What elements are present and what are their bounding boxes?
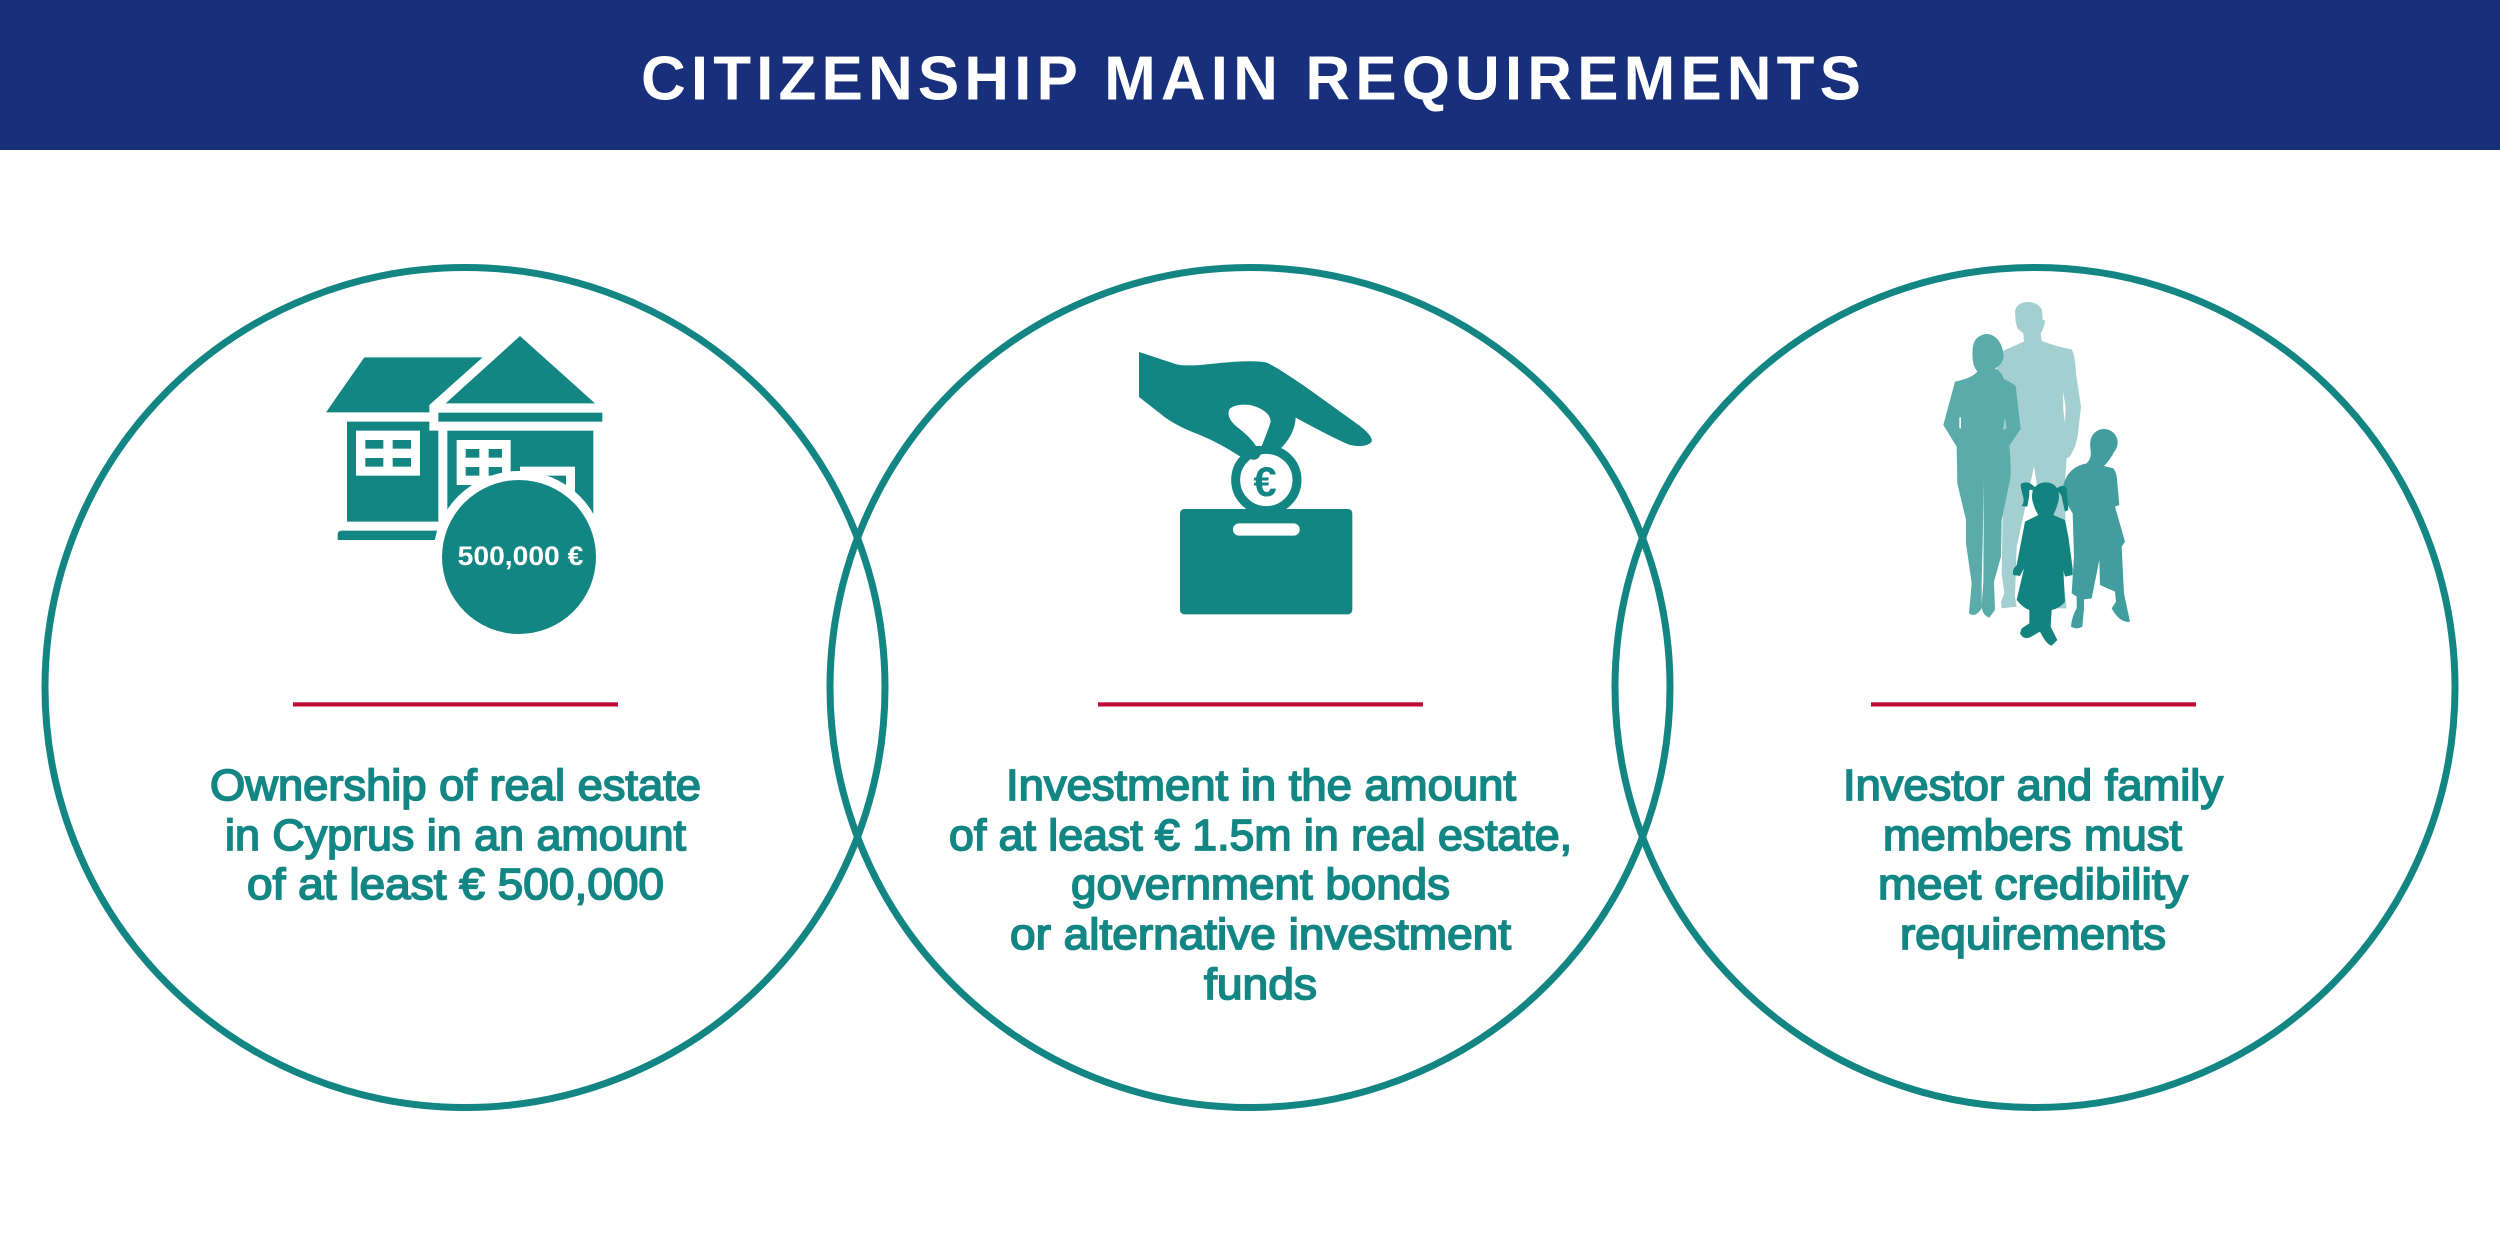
panel: real estate ownership bbox=[45, 268, 885, 1108]
text: investment requirement: government bonds bbox=[1071, 860, 1450, 909]
text: credibility requirement: members must bbox=[1883, 811, 2182, 860]
divider line 1 bbox=[293, 702, 618, 706]
divider line 3 bbox=[1871, 702, 2196, 706]
circle outline 1 bbox=[45, 268, 885, 1108]
circle outline 2 bbox=[830, 268, 1670, 1108]
text: credibility requirement: Investor and family bbox=[1843, 761, 2223, 810]
icon: hand dropping euro coin into box bbox=[1139, 352, 1372, 614]
text: investment requirement: or alternative investment bbox=[1010, 910, 1511, 959]
text: real estate requirement bbox=[210, 761, 701, 909]
text: credibility requirement: meet credibility bbox=[1878, 860, 2188, 909]
icon: house with price coin: 500,000 € bbox=[458, 541, 584, 571]
icon: hand dropping euro coin into box: € bbox=[1253, 458, 1277, 505]
divider line 2 bbox=[1098, 702, 1423, 706]
panel: investment bbox=[830, 268, 1670, 1108]
text: credibility requirement bbox=[1843, 761, 2223, 959]
text: real estate requirement: in Cyprus in an amount bbox=[225, 811, 686, 860]
text: credibility requirement: requirements bbox=[1900, 910, 2166, 959]
text: real estate requirement: of at least € 500,000 bbox=[247, 860, 664, 909]
panel: credibility bbox=[1615, 268, 2455, 1108]
text: investment requirement: Investment in the amount bbox=[1006, 761, 1516, 810]
text: real estate requirement: Ownership of real estate bbox=[210, 761, 701, 810]
text: investment requirement: funds bbox=[1204, 960, 1317, 1009]
circle outline 3 bbox=[1615, 268, 2455, 1108]
text: investment requirement bbox=[949, 761, 1572, 1009]
title: CITIZENSHIP MAIN REQUIREMENTS bbox=[641, 44, 1861, 114]
header banner bbox=[0, 0, 2500, 150]
icon: house with price coin bbox=[326, 336, 605, 643]
icon: family silhouettes bbox=[1943, 302, 2130, 646]
text: investment requirement: of at least € 1.5m in real estate, bbox=[949, 811, 1572, 860]
